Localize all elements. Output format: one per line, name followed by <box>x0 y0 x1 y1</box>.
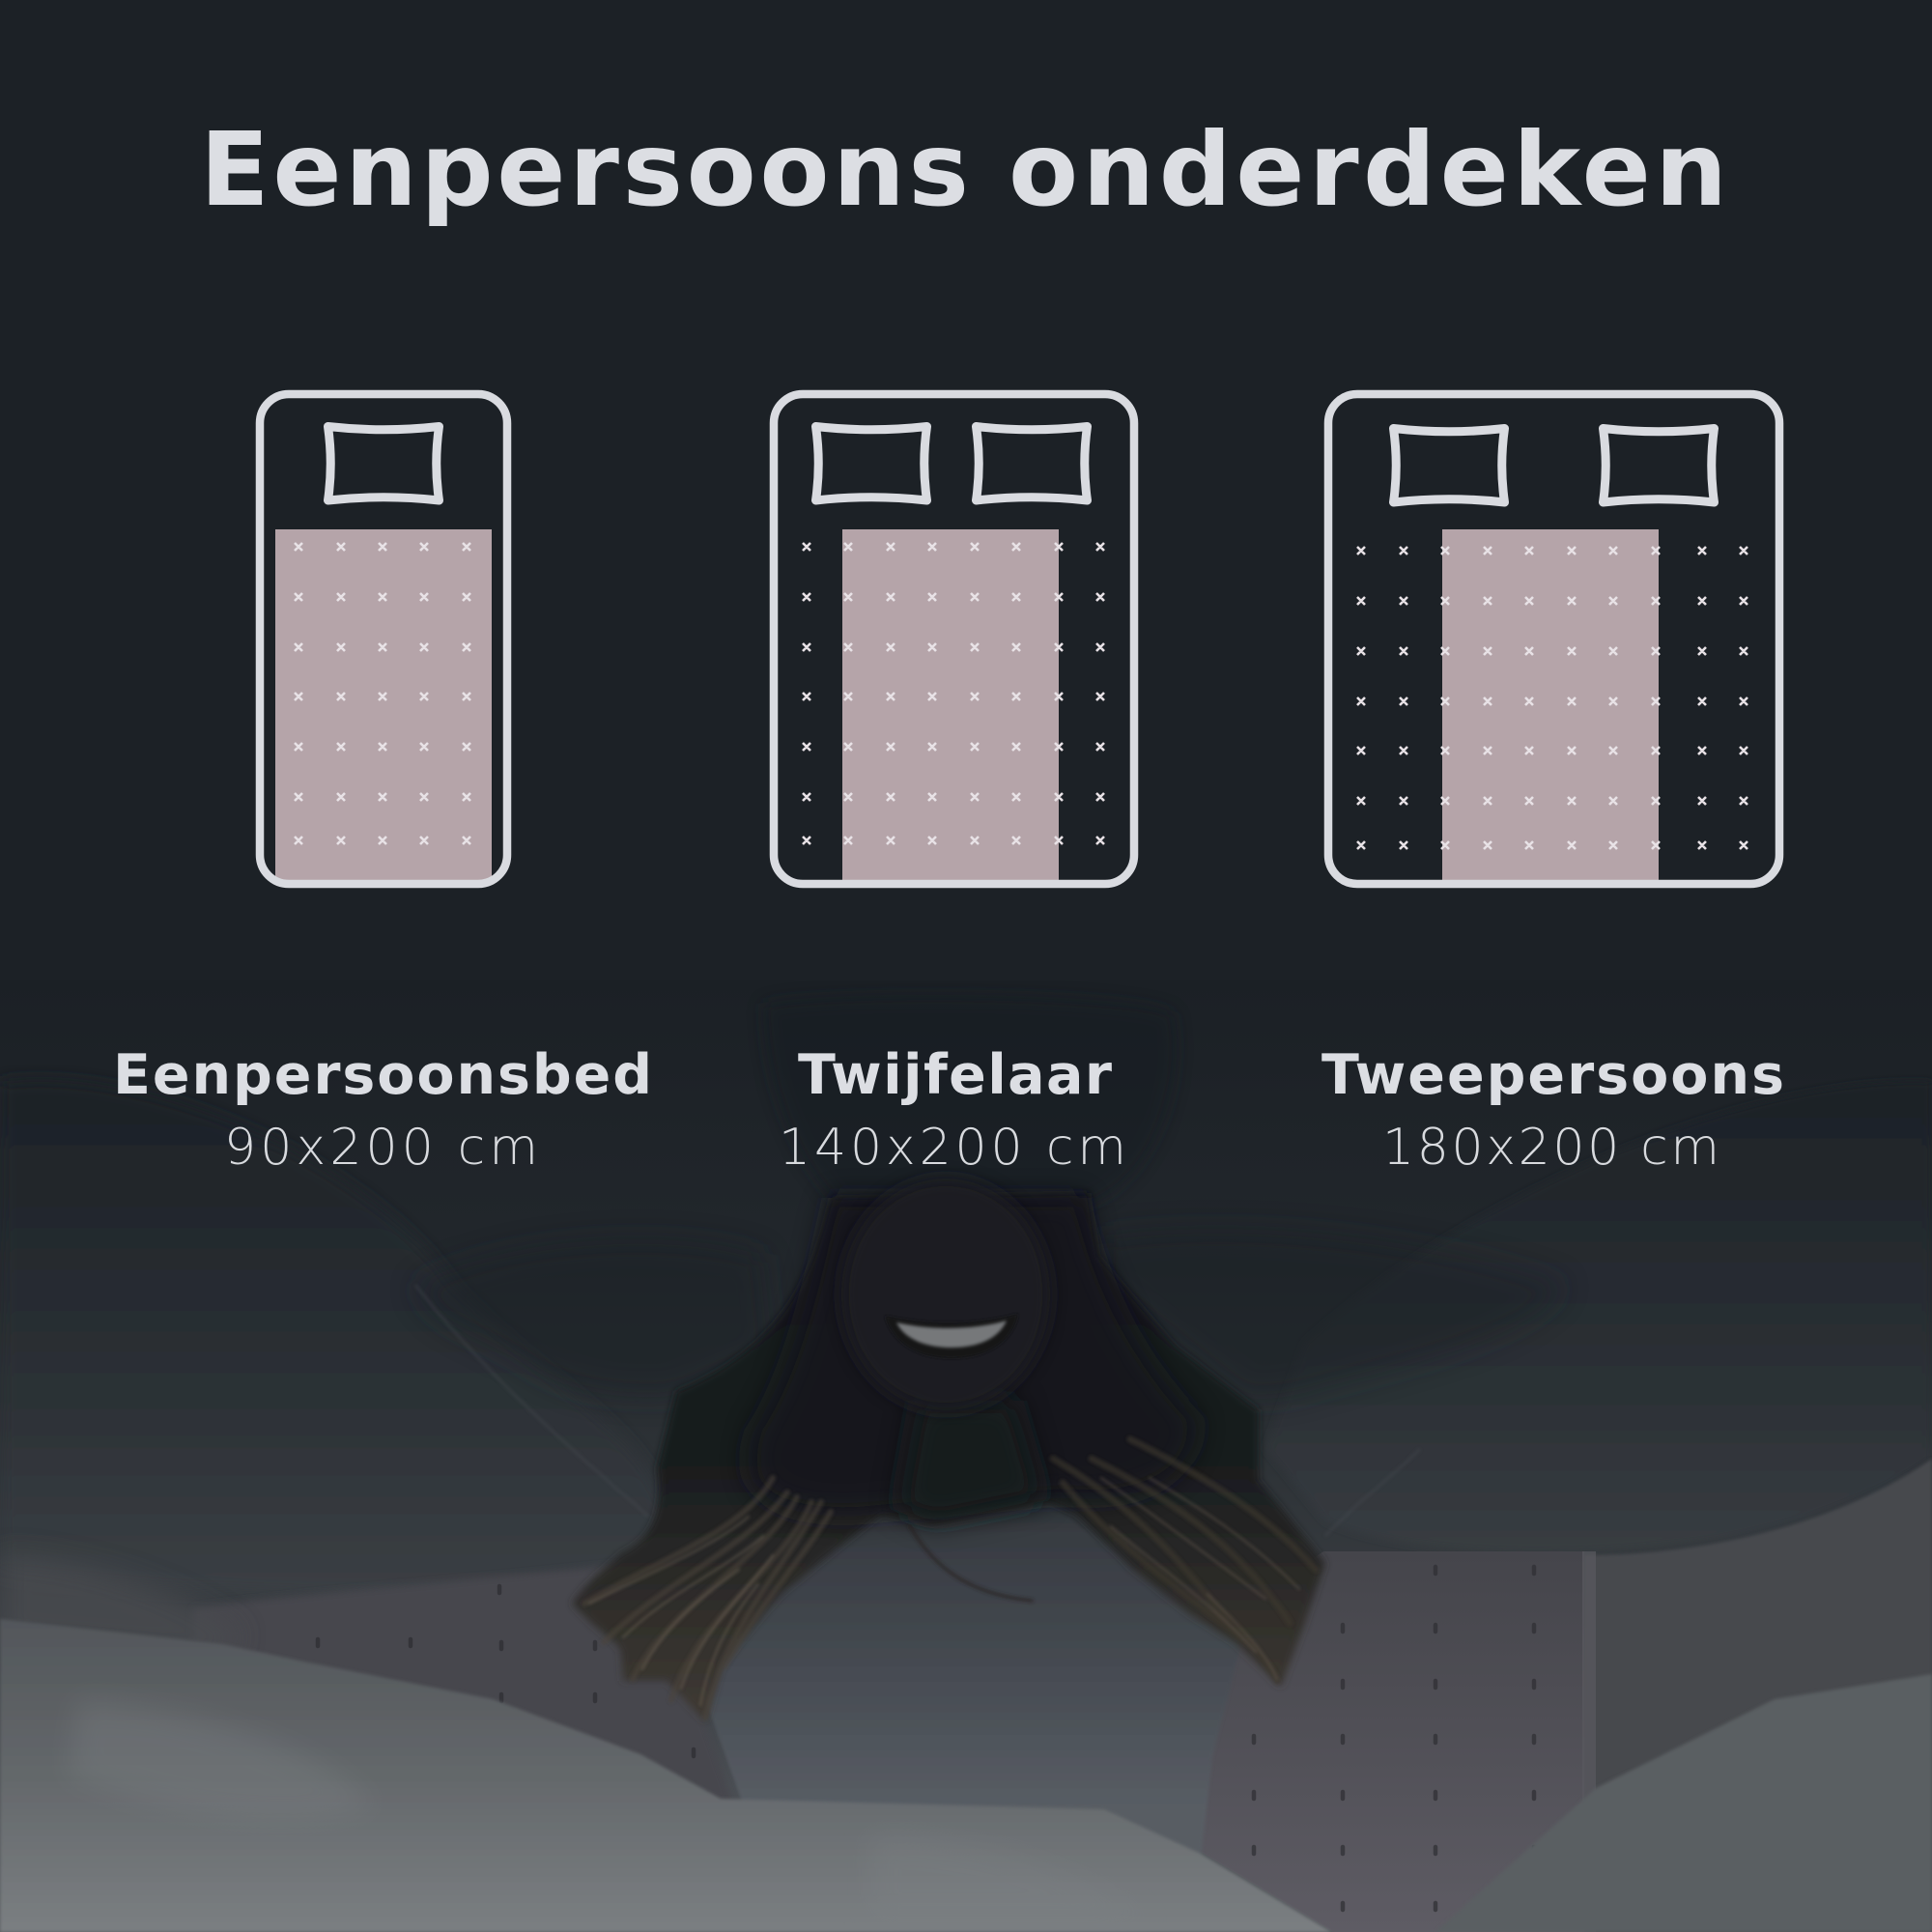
label: twijfelaar: Twijfelaar <box>798 1043 1112 1107</box>
stitch pattern <box>803 543 1104 844</box>
duvet highlights <box>83 1711 315 1781</box>
bed icon: twijfelaar <box>774 394 1134 884</box>
bed frame <box>260 394 507 884</box>
bed frame <box>1328 394 1779 884</box>
left arm <box>496 1335 523 1349</box>
label: tweepersoons <box>1321 1043 1784 1177</box>
label: eenpersoonsbed: Eenpersoonsbed <box>113 1043 652 1107</box>
pillow edge lines <box>421 1291 451 1327</box>
title: Eenpersoons <box>200 111 969 229</box>
blanket <box>1442 529 1659 882</box>
label: twijfelaar <box>779 1043 1126 1177</box>
stitch pattern <box>295 543 470 844</box>
label: eenpersoonsbed: 90x200 cm <box>224 1119 538 1177</box>
label: tweepersoons: 180x200 cm <box>1382 1119 1719 1177</box>
face <box>874 1186 1017 1406</box>
blanket <box>842 529 1059 882</box>
stitch pattern <box>1357 547 1747 849</box>
pillow <box>328 427 439 500</box>
pillows <box>1393 429 1714 502</box>
quilted headboard right <box>1198 1551 1596 1932</box>
right pillow <box>1265 1081 1932 1552</box>
right arm <box>1284 1324 1490 1385</box>
bed icon: eenpersoonsbed <box>260 394 507 884</box>
dark hair core <box>769 1196 1118 1528</box>
neck <box>898 1401 1043 1522</box>
panel right of headboard <box>1596 1460 1932 1685</box>
blanket <box>275 529 492 882</box>
label: eenpersoonsbed <box>113 1043 652 1177</box>
label: twijfelaar: 140x200 cm <box>779 1119 1126 1177</box>
label: tweepersoons: Tweepersoons <box>1321 1043 1784 1107</box>
smile <box>885 1314 1018 1358</box>
hair strands <box>584 1439 1316 1718</box>
background photo: woman smiling in bed <box>0 1176 1932 1932</box>
dark shape above head <box>763 995 1177 1208</box>
left pillow <box>0 1079 667 1596</box>
bed icon: tweepersoons <box>1328 394 1779 884</box>
pillows <box>815 427 1088 500</box>
white top <box>711 1548 1233 1852</box>
title <box>200 111 1727 229</box>
title: onderdeken <box>1009 111 1727 229</box>
right duvet <box>1528 1674 1932 1932</box>
sheet left <box>0 1561 192 1639</box>
bed frame <box>774 394 1134 884</box>
hair mass <box>572 1193 1325 1721</box>
quilted headboard left <box>193 1565 734 1806</box>
left and front duvet <box>0 1619 1331 1932</box>
